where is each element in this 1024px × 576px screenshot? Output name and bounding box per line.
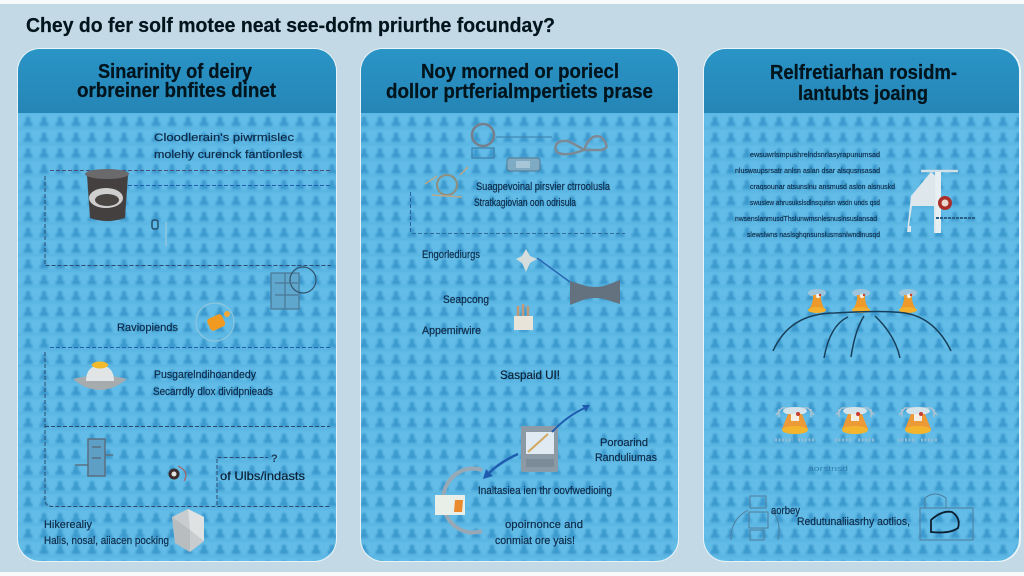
text: lower caption xyxy=(478,485,612,547)
left panel dashed dividers xyxy=(45,170,331,506)
icon: laptop xyxy=(521,426,558,472)
icon: small box xyxy=(514,304,533,330)
text: small paragraph xyxy=(735,150,895,239)
text: bottom note: Hikerealiy xyxy=(44,519,92,531)
intro text block: molehy curenck fantionlest xyxy=(154,149,302,161)
text: lower caption: Inaltasiea ien thr oovfwedioing xyxy=(478,485,612,497)
icon: outline figure xyxy=(731,496,779,540)
icon: outline bag xyxy=(920,494,973,540)
icon: key xyxy=(152,220,166,246)
text: Appemirwire: Appemirwire xyxy=(422,325,481,337)
left panel heading: orbreiner bnfites dinet xyxy=(77,80,276,102)
right panel heading: Relfretiarhan rosidm- xyxy=(770,62,957,84)
middle panel heading: dollor prtferialmpertiets prase xyxy=(386,81,653,103)
icon row: bells xyxy=(808,289,917,313)
icon: circular arrow with card xyxy=(435,469,482,532)
icon: glass globe xyxy=(271,267,316,309)
text: middle intro: Stratkagiovian oon odrisula xyxy=(474,197,577,209)
text: small paragraph: nwsenslanmusdThslunwmsnlesnuslnsuslansad xyxy=(735,214,877,223)
icon: star xyxy=(516,249,537,272)
text: of Ulbs/indasts: of Ulbs/indasts xyxy=(220,469,305,483)
text: Engorlediurgs: Engorlediurgs xyxy=(422,249,480,261)
text: small paragraph: slewslwns naslsghqnsunslusmsnlwndlnusqd xyxy=(747,230,880,239)
middle panel heading: Noy morned or poriecl xyxy=(421,61,619,83)
text: bottom caption xyxy=(771,505,910,528)
text: Saspaid UI: Saspaid UI! xyxy=(500,368,560,382)
text: bottom caption: aorbey xyxy=(771,505,800,517)
text: bowl description: Secarrdly dlox dividpnieads xyxy=(153,386,273,398)
text: small paragraph: swuslew ahrusukslsdlnsqunsn wsdn unds qsd xyxy=(750,198,880,207)
caption under drones: aorstnsd xyxy=(808,464,848,473)
text: bottom note xyxy=(44,519,169,547)
icon: double loop xyxy=(556,136,606,154)
text: lower caption: conmiat ore yais! xyxy=(495,535,575,547)
intro text block: Cloodlerain's piwrmislec xyxy=(154,132,295,144)
icon: bowl xyxy=(73,362,127,390)
middle panel heading xyxy=(386,61,653,103)
network arcs xyxy=(773,312,951,358)
text: bottom note: Halis, nosal, aiiacen pocking xyxy=(44,535,169,547)
text: small paragraph: nluswaupsrsatr anlsn aslan dsar alsqusnsasad xyxy=(735,166,880,175)
text: lower caption: opoirnonce and xyxy=(505,519,583,531)
icon: jar xyxy=(85,169,129,221)
panel: left column xyxy=(14,45,340,565)
icon: device xyxy=(507,158,540,171)
text: of Ulbs/indasts xyxy=(220,453,305,483)
icon: chair with sign xyxy=(907,171,975,233)
intro text block xyxy=(154,132,302,161)
text: middle intro xyxy=(474,181,611,209)
left panel heading xyxy=(77,61,276,102)
icon row: drones xyxy=(775,407,938,440)
right panel heading xyxy=(770,62,957,105)
icon: bowtie xyxy=(570,280,620,305)
middle panel dashed guide xyxy=(410,192,625,234)
text: Seapcong: Seapcong xyxy=(443,294,489,306)
panel: right column xyxy=(700,45,1024,565)
panel: middle column xyxy=(357,45,682,565)
title: Chey do fer solf motee neat see-dofm priurthe focunday? xyxy=(26,15,555,37)
text: bottom caption: Redutunaliiasrhy aotlios, xyxy=(797,516,910,528)
icon: ring xyxy=(472,124,552,158)
icon: orange lock xyxy=(196,303,234,341)
text: bowl description: Pusgarelndihoandedy xyxy=(154,369,256,381)
arrow: to bowtie xyxy=(537,258,570,282)
text: Poroarind: Poroarind xyxy=(600,437,648,449)
text: Poroarind: Randuliumas xyxy=(595,452,657,464)
label: Raviopiends: Raviopiends xyxy=(117,322,178,334)
text: of Ulbs/indasts: ? xyxy=(271,453,278,465)
arrow: down left xyxy=(483,454,518,479)
icon: machine xyxy=(75,439,113,476)
right panel heading: lantubts joaing xyxy=(798,83,928,105)
text: Poroarind xyxy=(595,437,657,464)
left panel heading: Sinarinity of deiry xyxy=(98,61,253,83)
icon: circuit xyxy=(425,167,468,197)
icon: small face xyxy=(168,466,186,481)
arrow: up right xyxy=(552,405,590,432)
icon: box xyxy=(172,509,204,552)
text: middle intro: Suagpevoinal pirsvier ctrroolusla xyxy=(476,181,611,193)
text: bowl description xyxy=(153,369,273,398)
text: small paragraph: ewsuwrlsmpushrelndsnrlasyrapunumsad xyxy=(750,150,880,159)
text: small paragraph: craqsounar atsunslnu ansmusd aslon alsnuskd xyxy=(750,182,895,191)
